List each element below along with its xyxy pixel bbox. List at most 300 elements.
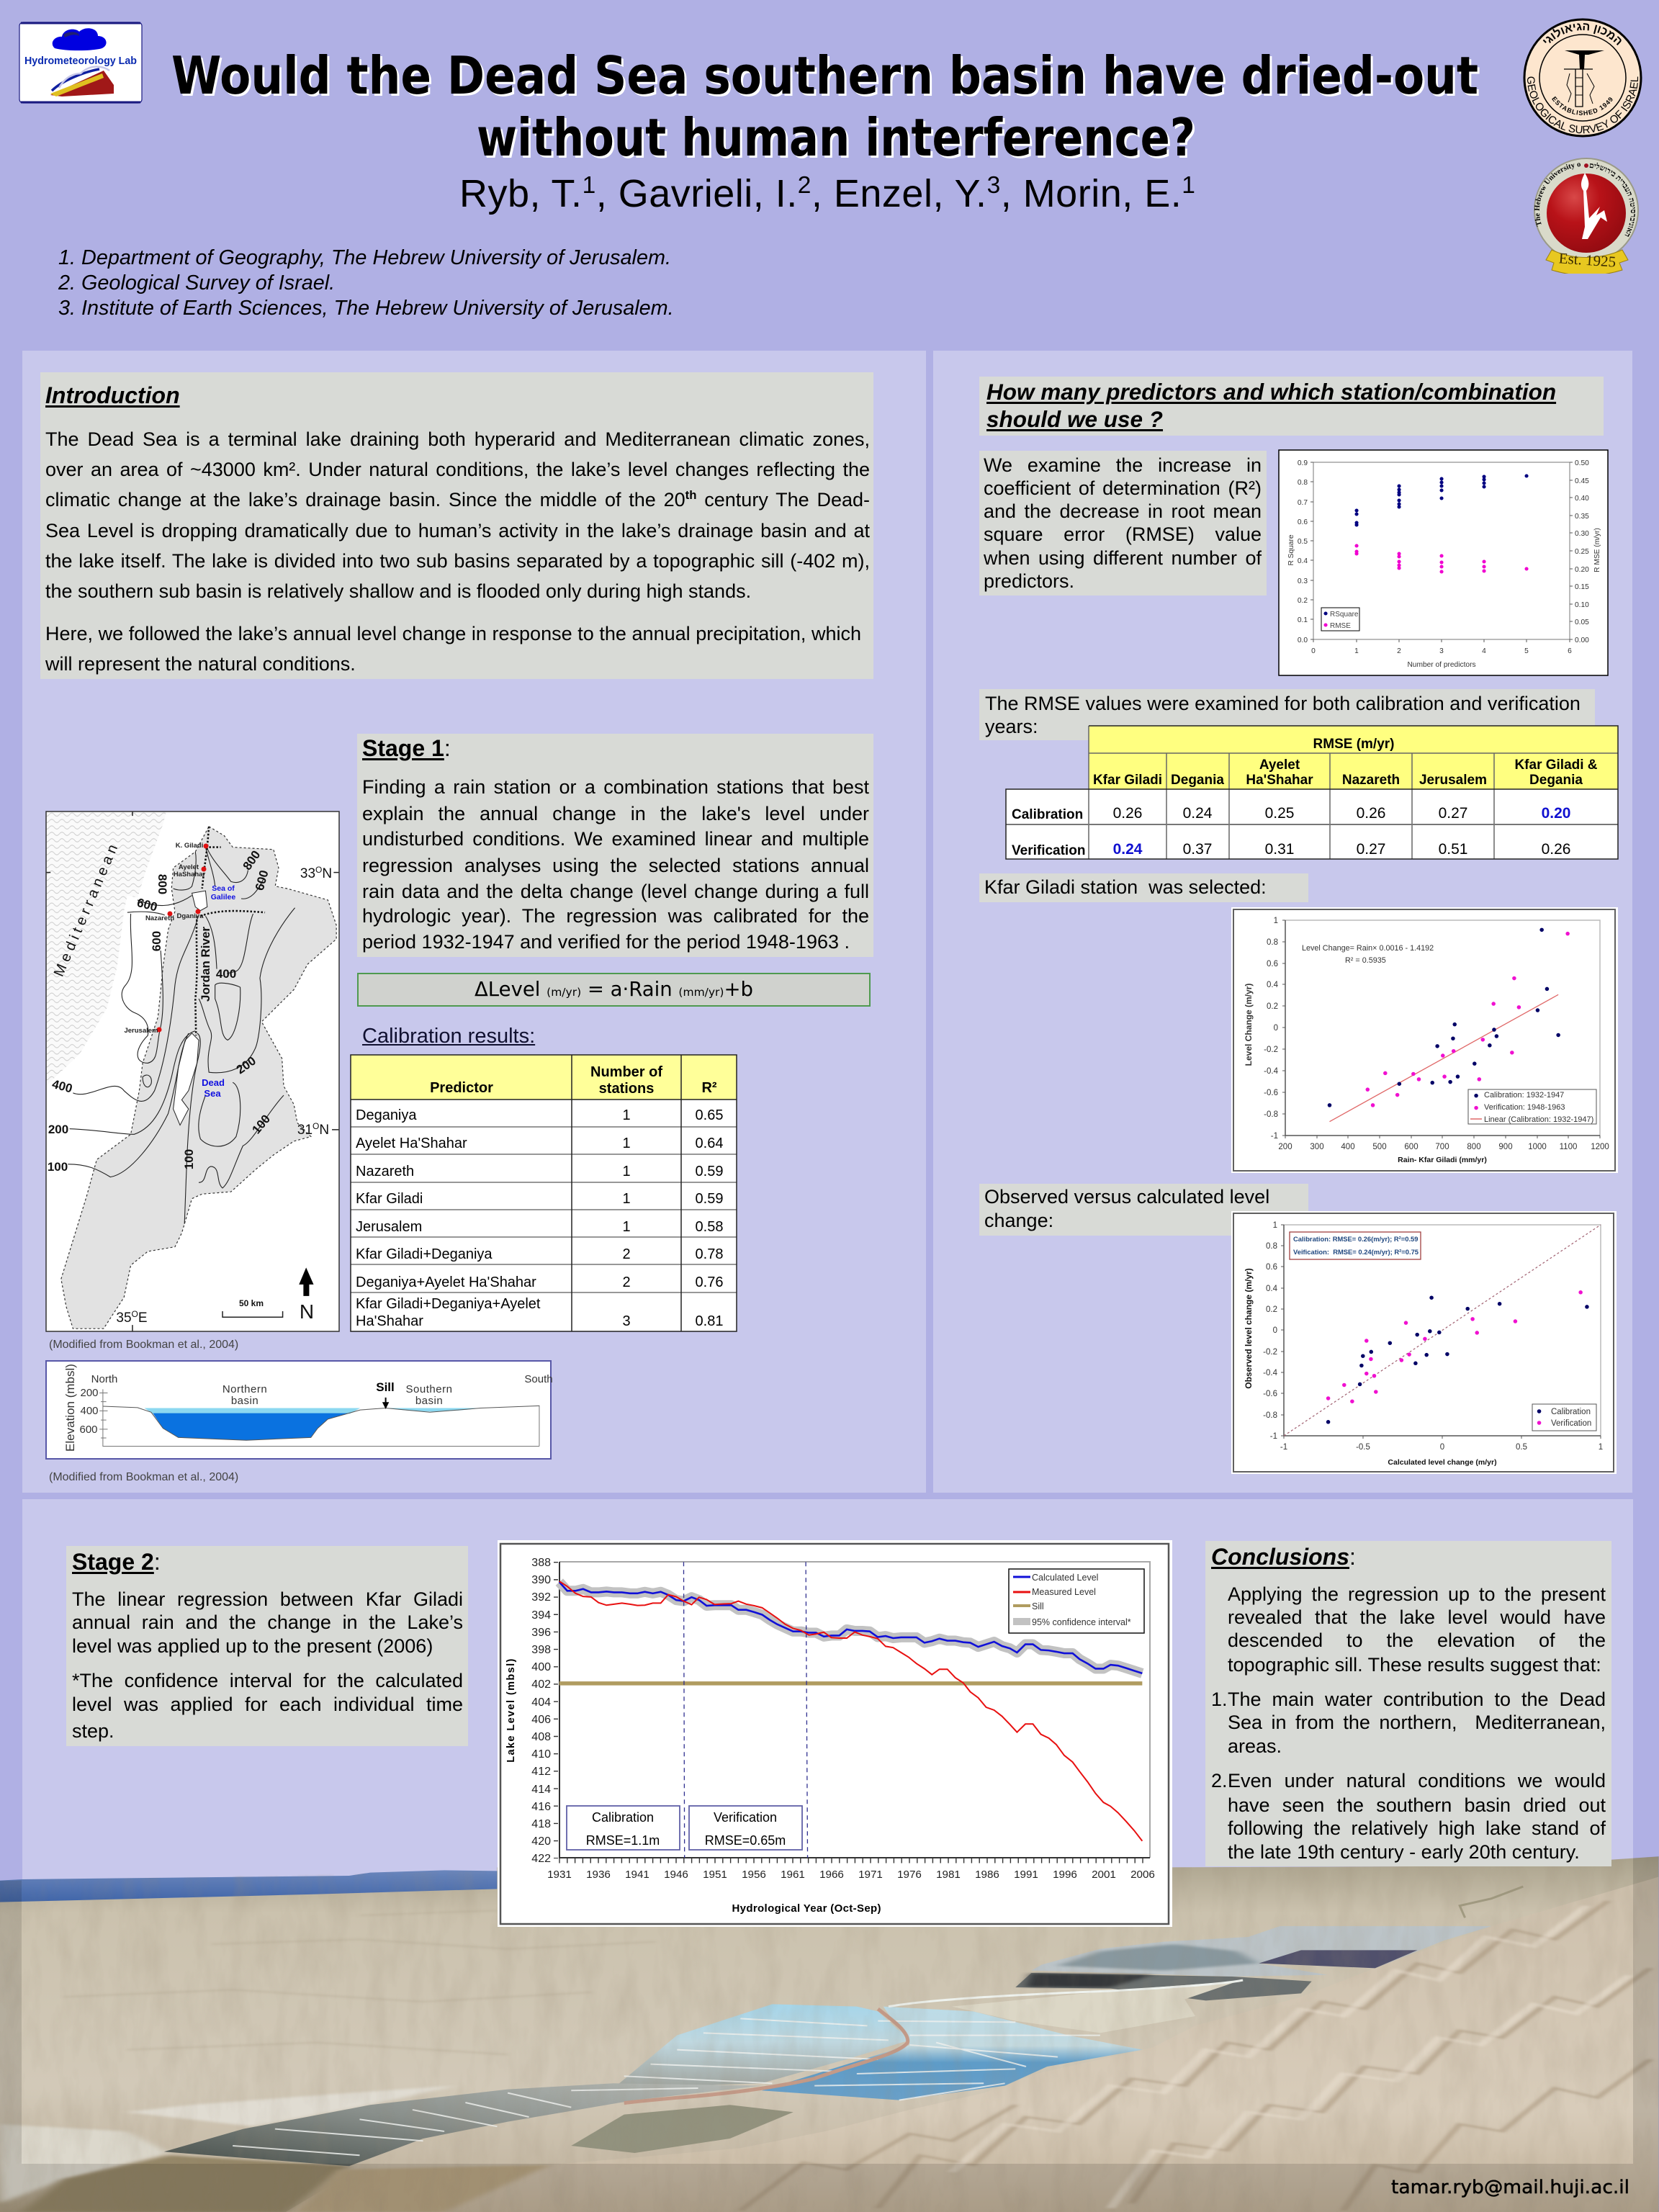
chart: level change versus Kfar Giladi rain: Level Change= Rain× 0.0016 - 1.4192 <box>1302 944 1434 953</box>
chart: lake level 1931-2006: 95% confidence interval* <box>1032 1617 1131 1627</box>
chart: observed versus calculated level change: -0.5 <box>1356 1443 1370 1452</box>
chart: lake level 1931-2006: 1996 <box>1053 1869 1077 1881</box>
map: rainfall isohyets of the Dead Sea basin: K. Giladi <box>176 842 203 850</box>
chart: R square and RMSE versus number of predictors: 0.0 <box>1298 637 1308 644</box>
map: rainfall isohyets of the Dead Sea basin: Dganiya <box>177 912 204 920</box>
chart: lake level 1931-2006: Calibration <box>592 1810 654 1825</box>
chart: lake level 1931-2006: 1936 <box>586 1869 611 1881</box>
chart: lake level 1931-2006: 1951 <box>703 1869 727 1881</box>
conclusions text: Applying the regression up to the present <box>1228 1583 1606 1605</box>
map: rainfall isohyets of the Dead Sea basin: N <box>300 1300 314 1323</box>
chart: lake level 1931-2006: 2001 <box>1092 1869 1116 1881</box>
stage 1 text: explain the annual change in the lake's level under <box>362 803 869 824</box>
chart: lake level 1931-2006: Calculated Level <box>1032 1573 1098 1583</box>
figure: north-south elevation cross section: Elevation (mbsl) <box>63 1364 77 1452</box>
chart: lake level 1931-2006: 1966 <box>819 1869 844 1881</box>
chart: observed versus calculated level change: 0.8 <box>1266 1242 1277 1251</box>
conclusions text: following the relatively high lake stand of <box>1228 1817 1606 1839</box>
figure: north-south elevation cross section: 600 <box>79 1424 98 1436</box>
text: observed versus calculated: Observed versus calculated level <box>984 1186 1269 1208</box>
table: calibration results: 0.78 <box>696 1246 723 1262</box>
map: rainfall isohyets of the Dead Sea basin: 600 <box>150 931 163 951</box>
chart: lake level 1931-2006: 1976 <box>897 1869 922 1881</box>
authors: Ryb, T.1, Gavrieli, I.2, Enzel, Y.3, Morin, E.1 <box>459 172 1195 215</box>
map: rainfall isohyets of the Dead Sea basin: 100 <box>48 1160 68 1174</box>
chart: observed versus calculated level change: -1 <box>1280 1443 1287 1452</box>
logo: Geological Survey of Israel: המכון הגיאולוגי <box>1542 23 1622 45</box>
heading: Stage 1: Stage 1: <box>362 735 451 761</box>
map: rainfall isohyets of the Dead Sea basin: 31 <box>297 1123 313 1138</box>
chart: observed versus calculated level change: Veification: RMSE= 0.24(m/yr); R²=0.75 <box>1293 1248 1419 1256</box>
chart: level change versus Kfar Giladi rain: 1 <box>1274 917 1278 925</box>
chart: R square and RMSE versus number of predictors: 0.40 <box>1575 495 1589 503</box>
chart: observed versus calculated level change: -1 <box>1270 1432 1277 1441</box>
stage 2 text: level was applied for each individual time <box>72 1694 463 1715</box>
map: rainfall isohyets of the Dead Sea basin: Sea of <box>212 884 235 893</box>
conclusions text: descended to the elevation of the <box>1228 1629 1606 1651</box>
table: calibration results: Kfar Giladi <box>356 1191 423 1207</box>
table: RMSE calibration and verification: RMSE (m/yr) <box>1313 737 1394 752</box>
chart: lake level 1931-2006: 394 <box>531 1609 551 1622</box>
chart: lake level 1931-2006: 412 <box>531 1766 551 1778</box>
table: RMSE calibration and verification: 0.27 <box>1439 805 1467 822</box>
map: rainfall isohyets of the Dead Sea basin: 50 km <box>239 1298 264 1308</box>
panel: predictors heading: should we use ? <box>986 406 1163 432</box>
table: calibration results: Deganiya <box>356 1107 417 1123</box>
table: calibration results: 1 <box>622 1164 631 1179</box>
stage 2 text: annual rain and the change in the Lake’s <box>72 1611 463 1633</box>
chart: lake level 1931-2006: Measured Level <box>1032 1587 1096 1597</box>
stage 2 text: *The confidence interval for the calculated <box>72 1670 463 1691</box>
chart: level change versus Kfar Giladi rain: -0.6 <box>1264 1089 1278 1097</box>
chart: lake level 1931-2006: 408 <box>531 1731 551 1743</box>
chart: level change versus Kfar Giladi rain: Verification: 1948-1963 <box>1484 1103 1565 1112</box>
chart: R square and RMSE versus number of predictors: 0.15 <box>1575 583 1589 591</box>
chart: lake level 1931-2006: 2006 <box>1130 1869 1155 1881</box>
conclusions text <box>1211 1583 1606 1863</box>
conclusions text: areas. <box>1228 1735 1282 1757</box>
chart: lake level 1931-2006: 1971 <box>858 1869 883 1881</box>
chart: lake level 1931-2006: 422 <box>531 1853 551 1865</box>
table: RMSE calibration and verification: 0.31 <box>1265 841 1294 858</box>
figure: north-south elevation cross section: North <box>91 1373 117 1385</box>
table: RMSE calibration and verification: 0.37 <box>1183 841 1212 858</box>
map: rainfall isohyets of the Dead Sea basin: N <box>319 1123 329 1138</box>
chart: R square and RMSE versus number of predictors: 1 <box>1354 647 1359 655</box>
panel: predictors heading: How many predictors and which station/combination <box>986 379 1556 405</box>
panel: conclusions <box>1205 1541 1611 1866</box>
table: calibration results: 2 <box>622 1246 631 1262</box>
table: RMSE calibration and verification: 0.26 <box>1542 841 1570 858</box>
chart: R square and RMSE versus number of predictors: 0.1 <box>1298 616 1308 624</box>
chart: level change versus Kfar Giladi rain: -0.4 <box>1264 1067 1279 1076</box>
logo: Hebrew University of Jerusalem <box>1534 158 1639 274</box>
table: calibration results: Jerusalem <box>356 1219 422 1235</box>
chart: level change versus Kfar Giladi rain: 1000 <box>1528 1143 1547 1151</box>
chart: level change versus Kfar Giladi rain: Rain- Kfar Giladi (mm/yr) <box>1398 1156 1487 1164</box>
chart: lake level 1931-2006: 418 <box>531 1818 551 1830</box>
chart: lake level 1931-2006: 416 <box>531 1801 551 1813</box>
logo: Geological Survey of Israel <box>1524 19 1642 137</box>
chart: level change versus Kfar Giladi rain: R² = 0.5935 <box>1345 956 1386 965</box>
stage 1 text: hydrologic year). The regression was calibrated for the <box>362 905 869 927</box>
logo: Hydrometeorology Lab <box>19 22 143 104</box>
chart: level change versus Kfar Giladi rain: 600 <box>1404 1143 1419 1151</box>
chart: R square and RMSE versus number of predictors: 0 <box>1311 647 1316 655</box>
chart: observed versus calculated level change: 1 <box>1273 1221 1277 1230</box>
chart: R square and RMSE versus number of predictors: R Square <box>1287 534 1295 566</box>
figure: north-south elevation cross section: basin <box>415 1395 443 1407</box>
text: predictors explanation <box>979 451 1267 595</box>
map: rainfall isohyets of the Dead Sea basin: 100 <box>249 1112 273 1136</box>
chart: lake level 1931-2006: 1941 <box>625 1869 649 1881</box>
text: observed versus calculated <box>979 1184 1308 1236</box>
table: RMSE calibration and verification: 0.20 <box>1542 805 1570 822</box>
stage 2 text: level was applied up to the present (2006) <box>72 1635 433 1657</box>
chart: lake level 1931-2006: Lake Level (mbsl) <box>505 1658 517 1763</box>
table: RMSE calibration and verification: 0.51 <box>1439 841 1467 858</box>
conclusions text: Even under natural conditions we would <box>1228 1770 1606 1791</box>
table: RMSE calibration and verification: 0.26 <box>1357 805 1385 822</box>
chart: observed versus calculated level change: Calibration: RMSE= 0.26(m/yr); R²=0.59 <box>1293 1235 1419 1243</box>
chart: observed versus calculated level change: 0.2 <box>1266 1305 1277 1314</box>
affiliations: 3. Institute of Earth Sciences, The Hebrew University of Jerusalem. <box>58 297 674 320</box>
conclusions text: have seen the southern basin dried out <box>1228 1794 1606 1816</box>
logo: Hebrew University of Jerusalem: האוניברסיטה העברית בירושלים <box>1590 163 1636 237</box>
table: RMSE calibration and verification: Degania <box>1171 773 1224 788</box>
chart: lake level 1931-2006: 1986 <box>975 1869 999 1881</box>
map: rainfall isohyets of the Dead Sea basin: Jordan River <box>199 927 212 1002</box>
table: calibration results: Kfar Giladi+Deganiya <box>356 1246 493 1262</box>
table: calibration results: Deganiya+Ayelet Ha'Shahar <box>356 1274 536 1290</box>
introduction text: will represent the natural conditions. <box>45 653 356 675</box>
chart: lake level 1931-2006: 1991 <box>1014 1869 1038 1881</box>
chart: lake level 1931-2006: RMSE=1.1m <box>586 1833 660 1848</box>
chart: observed versus calculated level change: -0.2 <box>1263 1348 1277 1357</box>
equation box: ΔLevel (m/yr) = a·Rain (mm/yr)+b <box>475 978 753 1001</box>
map: rainfall isohyets of the Dead Sea basin: Nazareth <box>145 914 174 922</box>
chart: R square and RMSE versus number of predictors: 0.6 <box>1298 518 1308 526</box>
chart: lake level 1931-2006: 1981 <box>936 1869 961 1881</box>
table: calibration results: Number of <box>590 1064 662 1080</box>
chart: R square and RMSE versus number of predictors: 0.20 <box>1575 566 1589 574</box>
stage 2 text: step. <box>72 1720 114 1742</box>
chart: lake level 1931-2006: RMSE=0.65m <box>705 1833 786 1848</box>
map: rainfall isohyets of the Dead Sea basin: 400 <box>50 1077 74 1096</box>
chart: lake level 1931-2006: 404 <box>531 1696 551 1709</box>
text: observed versus calculated: change: <box>984 1210 1053 1231</box>
text: predictors explanation: square error (RMSE) value <box>984 523 1262 545</box>
panel: stage 2 <box>66 1546 468 1746</box>
logo: Hebrew University of Jerusalem: Est. 1925 <box>1558 249 1617 271</box>
chart: R square and RMSE versus number of predictors: 6 <box>1568 647 1572 655</box>
stage 1 text: rain data and the delta change (level change during a full <box>362 881 869 902</box>
chart: level change versus Kfar Giladi rain: 700 <box>1435 1143 1449 1151</box>
table: calibration results: 0.58 <box>696 1219 723 1235</box>
table: calibration results: 1 <box>622 1136 631 1151</box>
stage 1 text: period 1932-1947 and verified for the period 1948-1963 . <box>362 931 850 953</box>
chart: lake level 1931-2006: 1961 <box>781 1869 805 1881</box>
chart: lake level 1931-2006: 396 <box>531 1627 551 1639</box>
text: Kfar Giladi selected <box>979 873 1308 902</box>
figure: north-south elevation cross section: Northern <box>222 1383 267 1395</box>
figure: north-south elevation cross section: Sill <box>376 1380 395 1394</box>
chart: lake level 1931-2006: 388 <box>531 1557 551 1569</box>
map: rainfall isohyets of the Dead Sea basin: N <box>322 866 332 881</box>
map: rainfall isohyets of the Dead Sea basin: E <box>138 1310 148 1326</box>
table: calibration results: Nazareth <box>356 1164 414 1179</box>
figure: north-south elevation cross section: Southern <box>406 1383 452 1395</box>
chart: R square and RMSE versus number of predictors: 0.4 <box>1298 557 1308 565</box>
panel: introduction <box>40 372 873 679</box>
figure: north-south elevation cross section: basin <box>231 1395 258 1407</box>
chart: level change versus Kfar Giladi rain: -1 <box>1271 1132 1278 1141</box>
chart: observed versus calculated level change: -0.8 <box>1263 1411 1277 1420</box>
text: Kfar Giladi selected: Kfar Giladi station was selected: <box>984 876 1267 898</box>
map: rainfall isohyets of the Dead Sea basin: 800 <box>156 874 169 894</box>
introduction text: Sea Level is dropping dramatically due to human’s activity in the lake’s drainage basin and at <box>45 520 870 541</box>
text: RMSE intro <box>979 689 1595 740</box>
chart: R square and RMSE versus number of predictors: 0.7 <box>1298 499 1308 507</box>
chart: lake level 1931-2006: 390 <box>531 1574 551 1586</box>
conclusions text: 1. <box>1211 1689 1228 1710</box>
equation box <box>357 973 871 1007</box>
table: RMSE calibration and verification: Kfar Giladi & <box>1514 757 1598 773</box>
chart: lake level 1931-2006: 410 <box>531 1748 551 1761</box>
chart: R square and RMSE versus number of predictors: 0.25 <box>1575 548 1589 556</box>
table: calibration results: 0.64 <box>696 1136 723 1151</box>
chart: observed versus calculated level change: Calibration <box>1551 1408 1591 1416</box>
text: RMSE intro: years: <box>985 716 1038 737</box>
chart: observed versus calculated level change: -0.4 <box>1263 1369 1278 1377</box>
chart: level change versus Kfar Giladi rain: 1100 <box>1560 1143 1577 1151</box>
table: calibration results: Ayelet Ha'Shahar <box>356 1136 467 1151</box>
chart: level change versus Kfar Giladi rain: Linear (Calibration: 1932-1947) <box>1484 1115 1593 1124</box>
introduction text: over an area of ~43000 km². Under natural conditions, the lake’s level changes reflecting the <box>45 459 870 480</box>
chart: lake level 1931-2006: Verification <box>714 1810 777 1825</box>
chart: lake level 1931-2006: 1956 <box>742 1869 766 1881</box>
chart: R square and RMSE versus number of predictors: 0.45 <box>1575 477 1589 485</box>
conclusions text: topographic sill. These results suggest that: <box>1228 1654 1601 1676</box>
chart: observed versus calculated level change: 0.4 <box>1266 1285 1278 1293</box>
chart: R square and RMSE versus number of predictors: 5 <box>1524 647 1529 655</box>
table: RMSE calibration and verification: Calibration <box>1012 807 1083 822</box>
table: RMSE calibration and verification: 0.24 <box>1183 805 1213 822</box>
chart: level change versus Kfar Giladi rain: 300 <box>1310 1143 1324 1151</box>
heading: Introduction: Introduction <box>45 382 180 408</box>
chart: R square and RMSE versus number of predictors: 0.2 <box>1298 597 1308 605</box>
introduction text <box>45 428 870 675</box>
conclusions text: revealed that the lake level would have <box>1228 1606 1606 1628</box>
text: RMSE intro: The RMSE values were examined for both calibration and verification <box>985 693 1581 714</box>
table: RMSE calibration and verification: Ha'Shahar <box>1246 773 1313 788</box>
map: rainfall isohyets of the Dead Sea basin: Mediterranean <box>51 842 121 979</box>
map: rainfall isohyets of the Dead Sea basin: O <box>315 865 322 875</box>
chart: R square and RMSE versus number of predictors: 0.9 <box>1298 459 1308 467</box>
map: rainfall isohyets of the Dead Sea basin: 35 <box>116 1310 132 1326</box>
chart: level change versus Kfar Giladi rain: 200 <box>1278 1143 1292 1151</box>
table: RMSE calibration and verification: Ayelet <box>1259 757 1300 773</box>
table: calibration results: 0.81 <box>696 1313 723 1329</box>
chart: lake level 1931-2006: 1931 <box>547 1869 572 1881</box>
chart: R square and RMSE versus number of predictors: 0.8 <box>1298 479 1308 487</box>
chart: R square and RMSE versus number of predictors: 0.5 <box>1298 538 1308 546</box>
chart: observed versus calculated level change: Calculated level change (m/yr) <box>1388 1458 1497 1467</box>
chart: lake level 1931-2006: 1946 <box>664 1869 688 1881</box>
map: rainfall isohyets of the Dead Sea basin: 200 <box>234 1054 258 1076</box>
introduction text: the lake itself. The lake is divided into two sub basins separated by a topographic sill (-402 m), <box>45 550 870 572</box>
stage 1 text: regression analyses using the selected stations annual <box>362 855 869 876</box>
title: without human interference? <box>477 107 1195 168</box>
chart: R square and RMSE versus number of predictors: R MSE (m/yr) <box>1593 528 1601 572</box>
chart: level change versus Kfar Giladi rain: 0.2 <box>1267 1002 1278 1011</box>
figure: north-south elevation cross section: 400 <box>80 1405 99 1417</box>
affiliations: 1. Department of Geography, The Hebrew University of Jerusalem. <box>58 246 671 269</box>
chart: observed versus calculated level change: 0 <box>1440 1443 1444 1452</box>
stage 1 text <box>362 776 869 953</box>
table: calibration results: 1 <box>622 1107 631 1123</box>
table: RMSE calibration and verification: Verification <box>1012 843 1085 858</box>
chart: lake level 1931-2006: 392 <box>531 1591 551 1604</box>
chart: level change versus Kfar Giladi rain: 800 <box>1467 1143 1481 1151</box>
chart: level change versus Kfar Giladi rain: Level Change (m/yr) <box>1244 984 1254 1066</box>
table: RMSE calibration and verification: Nazareth <box>1342 773 1400 788</box>
text: predictors explanation: coefficient of determination (R²) <box>984 477 1262 499</box>
chart: level change versus Kfar Giladi rain: 400 <box>1341 1143 1355 1151</box>
chart: level change versus Kfar Giladi rain: 0 <box>1274 1024 1278 1033</box>
table: calibration results: Predictor <box>430 1080 493 1096</box>
table: calibration results: 0.76 <box>696 1274 723 1290</box>
table: calibration results: R² <box>701 1080 717 1096</box>
map: rainfall isohyets of the Dead Sea basin: Sea <box>204 1088 221 1099</box>
table: calibration results: 1 <box>622 1219 631 1235</box>
chart: R square and RMSE versus number of predictors: 3 <box>1439 647 1444 655</box>
heading: Conclusions: Conclusions: <box>1211 1544 1356 1570</box>
text: predictors explanation: and the decrease in root mean <box>984 500 1262 522</box>
map: rainfall isohyets of the Dead Sea basin: 100 <box>182 1149 196 1169</box>
panel: predictors heading <box>979 377 1604 436</box>
chart: R square and RMSE versus number of predictors: 0.35 <box>1575 513 1589 521</box>
table: calibration results: Ha'Shahar <box>356 1313 423 1329</box>
panel: stage 1 <box>357 734 873 957</box>
chart: observed versus calculated level change: 0.5 <box>1516 1443 1527 1452</box>
conclusions text: The main water contribution to the Dead <box>1228 1689 1606 1710</box>
table: calibration results: 0.59 <box>696 1191 723 1207</box>
chart: level change versus Kfar Giladi rain: 1200 <box>1591 1143 1609 1151</box>
table: calibration results: Kfar Giladi+Deganiya+Ayelet <box>356 1296 541 1312</box>
title <box>171 45 1480 168</box>
table: calibration results: 3 <box>622 1313 631 1329</box>
introduction text: The Dead Sea is a terminal lake draining both hyperarid and Mediterranean climatic zones, <box>45 428 870 450</box>
chart: observed versus calculated level change: Verification <box>1551 1419 1591 1428</box>
figure: north-south elevation cross section: 200 <box>80 1387 99 1399</box>
text: predictors explanation: predictors. <box>984 570 1074 592</box>
chart: R square and RMSE versus number of predictors: RSquare <box>1330 611 1359 619</box>
chart: observed versus calculated level change: 0.6 <box>1266 1263 1277 1272</box>
email address: tamar.ryb@mail.huji.ac.il <box>1391 2177 1629 2198</box>
map: rainfall isohyets of the Dead Sea basin: Ayelet <box>179 863 199 871</box>
introduction text: climatic change at the lake’s drainage basin. Since the middle of the 20th century The Dead- <box>45 488 870 511</box>
introduction text: the southern sub basin is relatively shallow and is flooded only during high stands. <box>45 580 751 602</box>
stage 2 text <box>72 1588 463 1742</box>
chart: R square and RMSE versus number of predictors: 0.00 <box>1575 637 1589 644</box>
affiliations <box>58 246 674 320</box>
stage 1 text: undisturbed conditions. We examined linear and multiple <box>362 828 869 850</box>
chart: R square and RMSE versus number of predictors: Number of predictors <box>1407 661 1476 669</box>
chart: R square and RMSE versus number of predictors: 0.10 <box>1575 601 1589 609</box>
text: predictors explanation: We examine the increase in <box>984 454 1262 476</box>
table: RMSE calibration and verification: 0.26 <box>1113 805 1142 822</box>
introduction text: Here, we followed the lake’s annual level change in response to the annual precipitation, which <box>45 623 861 644</box>
table: calibration results: stations <box>599 1081 654 1097</box>
heading: Stage 2: Stage 2: <box>72 1549 161 1575</box>
map: rainfall isohyets of the Dead Sea basin: Jerusalem <box>124 1027 158 1035</box>
table: RMSE calibration and verification: 0.27 <box>1357 841 1385 858</box>
chart: level change versus Kfar Giladi rain: -0.2 <box>1264 1046 1278 1054</box>
table: calibration results: 2 <box>622 1274 631 1290</box>
table: RMSE calibration and verification: 0.24 <box>1113 841 1143 858</box>
map: rainfall isohyets of the Dead Sea basin: O <box>132 1309 138 1319</box>
table: calibration results: 0.59 <box>696 1164 723 1179</box>
chart: lake level 1931-2006: 420 <box>531 1835 551 1848</box>
chart: lake level 1931-2006: Sill <box>1032 1601 1044 1611</box>
figure: north-south elevation cross section: South <box>524 1373 553 1385</box>
chart: level change versus Kfar Giladi rain: 0.8 <box>1267 938 1278 947</box>
conclusions text: the late 19th century - early 20th century. <box>1228 1841 1580 1863</box>
chart: level change versus Kfar Giladi rain: Calibration: 1932-1947 <box>1484 1091 1564 1100</box>
logo: Geological Survey of Israel: GEOLOGICAL SURVEY OF ISRAEL <box>1527 76 1639 134</box>
chart: lake level 1931-2006: 398 <box>531 1644 551 1656</box>
table: RMSE calibration and verification: Jerusalem <box>1419 773 1487 788</box>
chart: R square and RMSE versus number of predictors: 0.50 <box>1575 459 1589 467</box>
chart: observed versus calculated level change: -0.6 <box>1263 1390 1277 1398</box>
map: rainfall isohyets of the Dead Sea basin: O <box>313 1121 319 1131</box>
conclusions text: Sea in from the northern, Mediterranean, <box>1228 1712 1606 1733</box>
map: rainfall isohyets of the Dead Sea basin: Galilee <box>211 893 235 902</box>
chart: R square and RMSE versus number of predictors: RMSE <box>1330 622 1351 630</box>
chart: lake level 1931-2006: 406 <box>531 1714 551 1726</box>
stage 2 text: The linear regression between Kfar Giladi <box>72 1588 463 1610</box>
map: rainfall isohyets of the Dead Sea basin: 600 <box>135 896 159 914</box>
chart: level change versus Kfar Giladi rain: -0.8 <box>1264 1110 1278 1119</box>
table: RMSE calibration and verification: 0.25 <box>1265 805 1294 822</box>
map: rainfall isohyets of the Dead Sea basin: Dead <box>202 1077 225 1088</box>
logo: Geological Survey of Israel: ESTABLISHED 1949 <box>1552 96 1613 115</box>
logo: Hydrometeorology Lab: Hydrometeorology Lab <box>24 55 137 67</box>
chart: observed versus calculated level change: 0 <box>1273 1326 1277 1335</box>
map source caption: (Modified from Bookman et al., 2004) <box>49 1339 238 1351</box>
stage 1 text: Finding a rain station or a combination stations that best <box>362 776 869 798</box>
chart: level change versus Kfar Giladi rain: 0.6 <box>1267 960 1278 968</box>
map: rainfall isohyets of the Dead Sea basin: HaShahar <box>174 871 205 878</box>
map: rainfall isohyets of the Dead Sea basin: 600 <box>253 868 271 892</box>
chart: observed versus calculated level change: Observed level change (m/yr) <box>1244 1268 1254 1389</box>
affiliations: 2. Geological Survey of Israel. <box>58 271 335 295</box>
chart: lake level 1931-2006: 402 <box>531 1678 551 1691</box>
table: RMSE calibration and verification: Kfar Giladi <box>1093 773 1162 788</box>
chart: lake level 1931-2006: 400 <box>531 1661 551 1673</box>
chart: level change versus Kfar Giladi rain: 500 <box>1372 1143 1387 1151</box>
table: calibration results: 1 <box>622 1191 631 1207</box>
map: rainfall isohyets of the Dead Sea basin: 33 <box>300 866 315 881</box>
text: predictors explanation: when using different number of <box>984 547 1262 569</box>
chart: level change versus Kfar Giladi rain: 0.4 <box>1267 981 1279 989</box>
chart: R square and RMSE versus number of predictors: 0.30 <box>1575 530 1589 538</box>
map: rainfall isohyets of the Dead Sea basin: 400 <box>216 967 236 981</box>
title: Would the Dead Sea southern basin have dried-out <box>171 45 1478 106</box>
cross section source caption: (Modified from Bookman et al., 2004) <box>49 1471 238 1483</box>
table: RMSE calibration and verification: Degania <box>1529 773 1583 788</box>
